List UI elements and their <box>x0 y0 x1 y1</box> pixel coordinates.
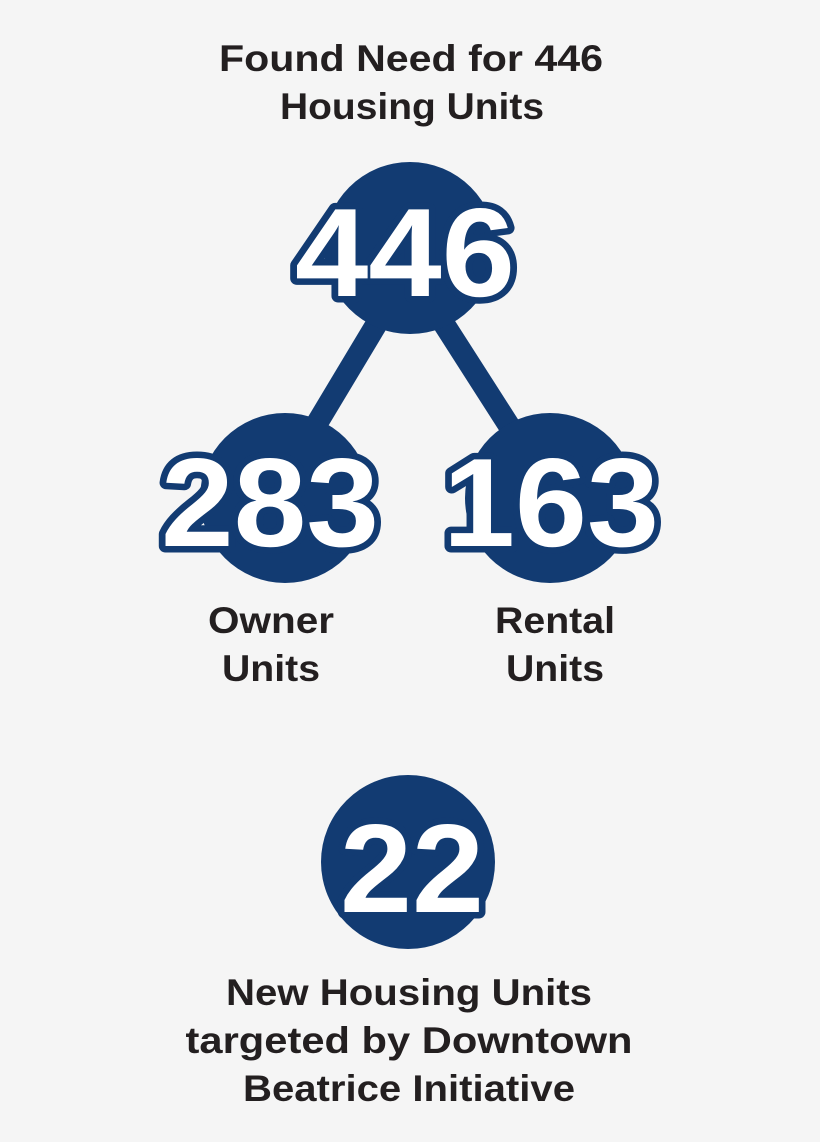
label: rental units <box>495 600 615 689</box>
bottom description: New Housing Units <box>226 972 592 1013</box>
label: owner units: Units <box>222 648 320 689</box>
title: Housing Units <box>280 86 544 127</box>
circle: total 446: 446 <box>295 182 515 323</box>
title: Found Need for 446 <box>219 38 603 79</box>
bottom description <box>186 972 632 1109</box>
bottom description: targeted by Downtown <box>186 1020 632 1061</box>
circle: owner 283: 283 <box>161 432 379 573</box>
title <box>219 38 603 127</box>
label: owner units <box>208 600 334 689</box>
circle: 22 new units <box>321 775 495 949</box>
circle: rental 163: 163 <box>443 432 659 573</box>
label: rental units: Units <box>506 648 604 689</box>
label: owner units: Owner <box>208 600 334 641</box>
bottom description: Beatrice Initiative <box>243 1068 575 1109</box>
connector lines <box>310 310 515 435</box>
circle: 22 new units: 22 <box>340 798 484 939</box>
label: rental units: Rental <box>495 600 615 641</box>
